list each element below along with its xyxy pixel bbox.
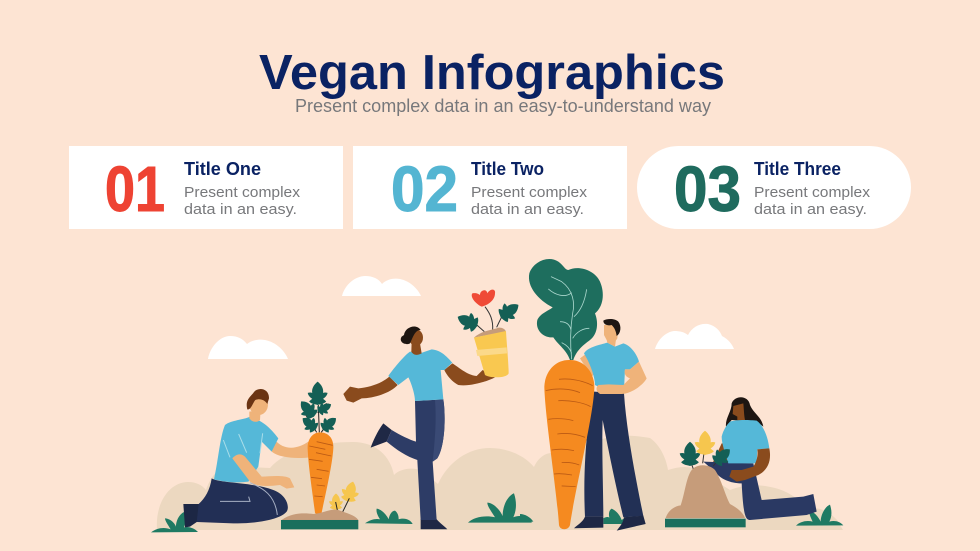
shirt [722, 420, 769, 463]
cloud: left [208, 336, 288, 359]
cloud: top centre [342, 276, 421, 296]
number 03: 03 [674, 153, 741, 225]
right arm [729, 448, 770, 482]
panel: card one [69, 146, 343, 229]
card one heading: Title One [184, 159, 261, 179]
right arm [444, 363, 495, 385]
neck [249, 410, 261, 422]
face [604, 325, 618, 342]
plant: grass left edge [520, 514, 533, 522]
panel: card three [637, 146, 911, 229]
planter [281, 520, 358, 529]
face [409, 329, 423, 346]
face [249, 394, 268, 415]
carrot [544, 360, 594, 529]
shirt [214, 417, 278, 482]
neck [606, 335, 617, 347]
shoes [574, 516, 646, 531]
left arm [580, 353, 595, 377]
number 02: 02 [391, 153, 458, 225]
plant: right grass [796, 505, 843, 526]
soil [282, 510, 358, 520]
plant: right grass [468, 493, 532, 523]
pot soil [474, 328, 506, 338]
left arm [343, 377, 398, 403]
flower [472, 290, 495, 307]
mound plants [680, 431, 735, 471]
trousers [387, 399, 445, 520]
carrot ridges [546, 379, 593, 487]
figure: kneeling woman with mound [665, 397, 843, 527]
carrot top [295, 382, 341, 435]
mound [666, 465, 745, 518]
figure: woman holding flower pot [343, 290, 532, 529]
right arm [597, 362, 647, 394]
face [733, 403, 745, 422]
background hills [157, 436, 843, 530]
hair [247, 389, 269, 409]
neck [411, 342, 422, 355]
card three text: Present complex [754, 184, 871, 201]
carrot [308, 432, 333, 515]
trousers [703, 462, 817, 520]
cloud: right [655, 324, 734, 349]
card three text line two: data in an easy. [754, 201, 867, 218]
near arm [232, 454, 294, 489]
shoe [183, 504, 199, 527]
figure: man with giant carrot [520, 259, 647, 531]
card one text line two: data in an easy. [184, 201, 297, 218]
yellow sprouts [329, 479, 362, 513]
hair [603, 319, 620, 336]
trousers [197, 478, 288, 523]
raised shoe [371, 423, 392, 448]
back foot [203, 490, 220, 502]
title: Vegan Infographics [259, 46, 725, 100]
plant: left grass [151, 512, 198, 532]
trousers [584, 392, 643, 517]
shirt [388, 349, 452, 401]
card one text: Present complex [184, 184, 301, 201]
planter [665, 519, 746, 527]
card two heading: Title Two [471, 159, 544, 179]
subtitle: Present complex data in an easy-to-understand way [295, 96, 711, 116]
left arm [712, 443, 732, 472]
card three heading: Title Three [754, 159, 841, 179]
card two text: Present complex [471, 184, 588, 201]
pot [474, 331, 509, 377]
standing shoe [421, 519, 447, 529]
plant: small grass [365, 509, 413, 524]
stems [475, 307, 504, 332]
leaf veins [548, 277, 589, 359]
hair [726, 397, 763, 427]
shirt [584, 343, 639, 391]
plant: grass behind [603, 509, 635, 524]
far arm [272, 440, 311, 458]
panel: card two [353, 146, 627, 229]
number 01: 01 [105, 153, 165, 225]
carrot leaf [529, 259, 603, 360]
hair [401, 326, 421, 344]
figure: kneeling man with carrot [151, 382, 362, 532]
card two text line two: data in an easy. [471, 201, 584, 218]
leaves [454, 297, 524, 334]
